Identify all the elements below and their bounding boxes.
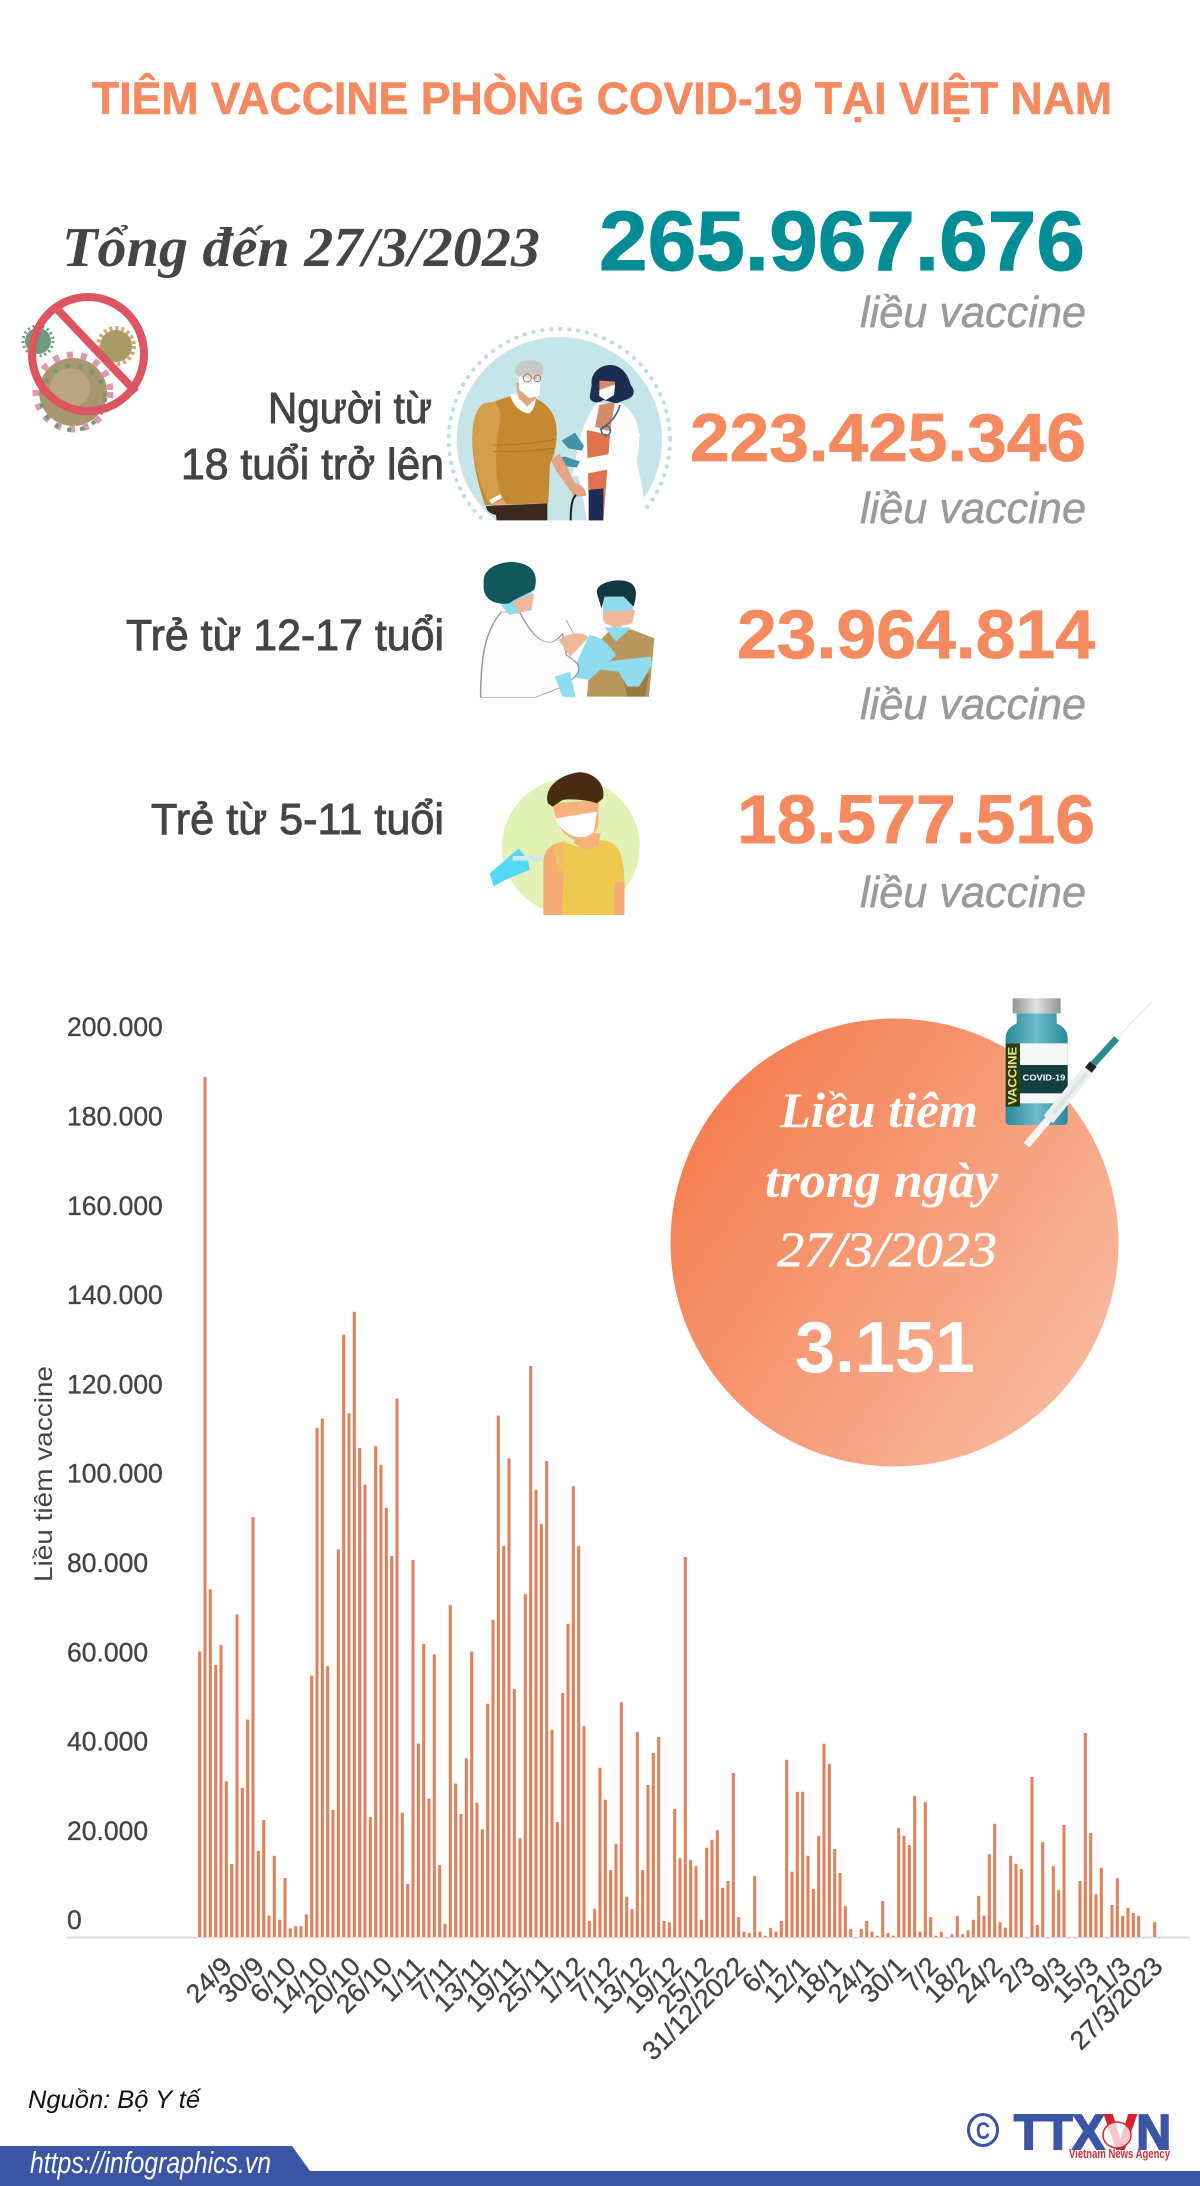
y axis labels: 20.000 (67, 1816, 148, 1846)
label: adults (181, 384, 444, 489)
y axis labels: 120.000 (67, 1369, 163, 1399)
x axis labels: 30/9 (212, 1951, 270, 2009)
panel: children 5-11 (151, 772, 1095, 917)
x axis labels: 25/11 (492, 1951, 559, 2018)
x axis labels: 7/12 (565, 1951, 623, 2009)
x axis labels: 7/11 (406, 1951, 462, 2007)
icon: vaccine vial and syringe: COVID-19 (1023, 1073, 1066, 1083)
y axis labels: 140.000 (67, 1280, 163, 1310)
callout: doses on 27/3/2023 (670, 998, 1152, 1466)
footer bar (0, 2145, 1200, 2186)
x axis labels: 21/3 (1079, 1951, 1136, 2009)
x axis labels: 24/2 (950, 1951, 1008, 2009)
x axis line (67, 1936, 1190, 1938)
x axis labels: 27/3/2023 (1064, 1951, 1169, 2056)
number: 5-11: 18.577.516 (737, 781, 1095, 858)
number: 12-17: 23.964.814 (737, 596, 1095, 673)
footer url: https://infographics.vn (30, 2145, 271, 2180)
label: 5-11: Trẻ từ 5-11 tuổi (151, 795, 444, 844)
doctor (555, 365, 645, 520)
callout text: Liều tiêm (779, 1082, 978, 1138)
x axis labels: 24/9 (180, 1951, 238, 2009)
callout text (765, 1082, 999, 1277)
total unit: liều vaccine (860, 288, 1086, 337)
x axis labels: 19/11 (460, 1951, 527, 2018)
x axis labels: 6/10 (244, 1951, 302, 2009)
y axis title: Liều tiêm vaccine (30, 1366, 58, 1582)
unit: 5-11: liều vaccine (860, 868, 1086, 917)
source: Nguồn: Bộ Y tế (28, 2086, 202, 2114)
globe (1103, 2122, 1131, 2148)
illustration: nurse vaccinating teenager (481, 562, 654, 697)
y axis labels: 160.000 (67, 1191, 163, 1221)
title: TIÊM VACCINE PHÒNG COVID-19 TẠI VIỆT NAM (92, 73, 1112, 124)
callout number: 3.151 (795, 1308, 975, 1388)
x axis labels: 15/3 (1047, 1951, 1104, 2009)
y axis labels: 60.000 (67, 1637, 148, 1667)
x axis labels: 1/11 (374, 1951, 430, 2007)
x axis labels: 6/1 (736, 1951, 783, 1998)
x axis labels: 18/2 (918, 1951, 976, 2009)
callout circle (670, 1018, 1118, 1466)
copyright mark (968, 2114, 998, 2146)
logo: TTXVN (968, 2106, 1171, 2161)
label: adults: 18 tuổi trở lên (181, 440, 444, 489)
y axis labels: 80.000 (67, 1548, 148, 1578)
elderly man (472, 360, 586, 520)
wordmark: TTXVN (1014, 2106, 1171, 2160)
x axis labels: 1/12 (533, 1951, 591, 2009)
panel: total doses (62, 194, 1086, 337)
unit: adults: liều vaccine (860, 484, 1086, 533)
label: 12-17: Trẻ từ 12-17 tuổi (126, 611, 444, 660)
x axis labels: 13/11 (428, 1951, 494, 2018)
tagline: Vietnam News Agency (1069, 2147, 1170, 2161)
illustration: child getting vaccine (490, 772, 640, 915)
number: adults: 223.425.346 (690, 400, 1086, 476)
x axis labels: 20/10 (298, 1951, 366, 2019)
x axis labels: 13/12 (587, 1951, 655, 2019)
callout text: trong ngày (765, 1152, 999, 1208)
x axis labels: 18/1 (790, 1951, 848, 2009)
panel: children 12-17 (126, 562, 1095, 729)
icon: crossed-out virus (23, 297, 144, 430)
x axis labels: 12/1 (758, 1951, 815, 2009)
y axis labels: 100.000 (67, 1459, 163, 1489)
illustration: elderly man vaccinated by doctor (446, 327, 672, 520)
icon: vaccine vial and syringe: VACCINE (1006, 1047, 1020, 1105)
x axis labels: 19/12 (619, 1951, 687, 2019)
callout text: 27/3/2023 (777, 1221, 997, 1277)
x axis labels: 14/10 (266, 1951, 334, 2019)
unit: 12-17: liều vaccine (860, 680, 1086, 729)
total number: 265.967.676 (599, 194, 1085, 288)
x axis labels: 31/12/2022 (636, 1951, 751, 2066)
y axis labels: 40.000 (67, 1727, 148, 1757)
x axis labels: 2/3 (993, 1951, 1040, 1998)
y axis labels: 180.000 (67, 1102, 163, 1132)
total label: Tổng đến 27/3/2023 (62, 217, 540, 279)
panel: adults 18+ (184, 327, 1085, 524)
x axis labels: 30/1 (854, 1951, 912, 2009)
x axis labels: 26/10 (330, 1951, 398, 2019)
bars (200, 1077, 1155, 1937)
bar chart: daily doses (30, 1012, 1190, 2066)
y axis labels: 200.000 (67, 1012, 163, 1042)
x axis labels: 7/2 (897, 1951, 944, 1998)
y axis labels: 0 (67, 1905, 82, 1935)
x axis labels: 25/12 (651, 1951, 719, 2019)
x axis labels: 9/3 (1025, 1951, 1072, 1998)
x axis labels: 24/1 (822, 1951, 880, 2009)
icon: vaccine vial and syringe (1006, 998, 1152, 1145)
y axis labels (67, 1012, 163, 1935)
x axis labels (180, 1951, 1169, 2066)
copyright mark: C (976, 2118, 990, 2145)
label: adults: Người từ (268, 384, 432, 433)
